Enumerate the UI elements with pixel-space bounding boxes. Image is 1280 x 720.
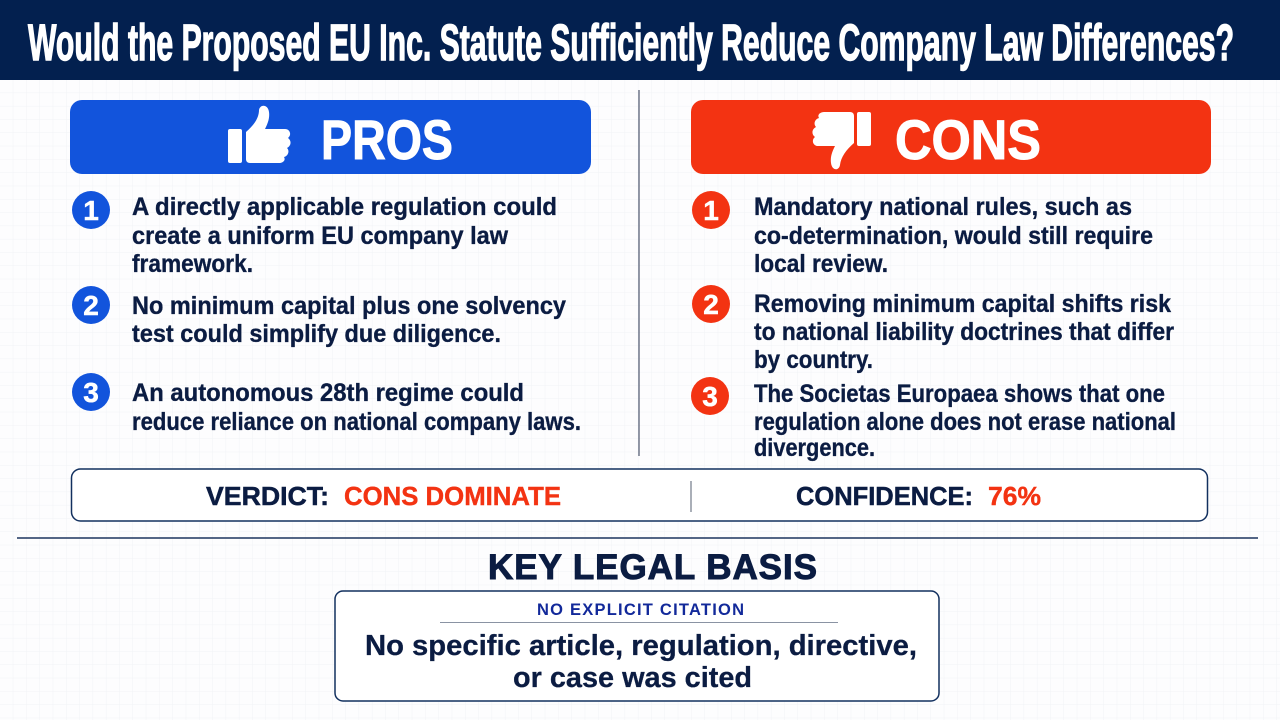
con 2: by country.: [754, 346, 873, 374]
con 3: divergence.: [754, 434, 875, 462]
con 1: local review.: [754, 250, 888, 278]
con 1: 1: [703, 195, 719, 226]
con 3: 3: [702, 381, 718, 412]
confidence: CONFIDENCE:: [796, 481, 973, 511]
pro 1: 1: [83, 195, 99, 226]
pro 2: No minimum capital plus one solvency: [132, 292, 566, 320]
citation text: [365, 630, 917, 694]
pro 1: [72, 191, 557, 278]
con 2: 2: [703, 289, 719, 320]
legal basis card: [335, 591, 939, 701]
pro 3: [72, 373, 581, 436]
pro 2: [72, 286, 566, 348]
citation text: or case was cited: [513, 662, 752, 694]
pro 3: reduce reliance on national company laws.: [132, 408, 581, 436]
verdict: CONS DOMINATE: [344, 481, 561, 511]
verdict: VERDICT:: [206, 481, 329, 511]
pro 2: test could simplify due diligence.: [132, 320, 501, 348]
pros heading: PROS: [321, 108, 453, 171]
pros header: [70, 100, 591, 174]
key legal basis heading: KEY LEGAL BASIS: [488, 548, 817, 587]
con 2: [692, 285, 1174, 374]
panel: pros: [70, 100, 591, 436]
pro 3: 3: [83, 377, 99, 408]
icon: thumbs up: [228, 106, 291, 163]
icon: thumbs down: [812, 112, 871, 169]
confidence: 76%: [988, 481, 1041, 511]
con 3: The Societas Europaea shows that one: [754, 380, 1165, 408]
pro 1: A directly applicable regulation could: [132, 193, 557, 221]
con 2: to national liability doctrines that differ: [754, 318, 1174, 346]
center divider between pros and cons: [638, 90, 640, 456]
pro 1: framework.: [132, 250, 253, 278]
con 1: co-determination, would still require: [754, 222, 1153, 250]
con 1: Mandatory national rules, such as: [754, 193, 1132, 221]
pro 1: create a uniform EU company law: [132, 222, 509, 250]
title banner: [0, 0, 1280, 80]
pro 2: 2: [83, 290, 99, 321]
citation text: No specific article, regulation, directive,: [365, 630, 917, 662]
con 1: [692, 191, 1153, 278]
verdict bar: [72, 469, 1208, 521]
con 3: regulation alone does not erase national: [754, 408, 1176, 436]
verdict: [206, 481, 561, 511]
pro 3: An autonomous 28th regime could: [132, 379, 524, 407]
con 2: Removing minimum capital shifts risk: [754, 290, 1171, 318]
cons header: [691, 100, 1211, 174]
con 3: [691, 377, 1176, 462]
cons heading: CONS: [895, 108, 1041, 171]
citation label: NO EXPLICIT CITATION: [537, 601, 744, 619]
panel: cons: [691, 100, 1211, 462]
